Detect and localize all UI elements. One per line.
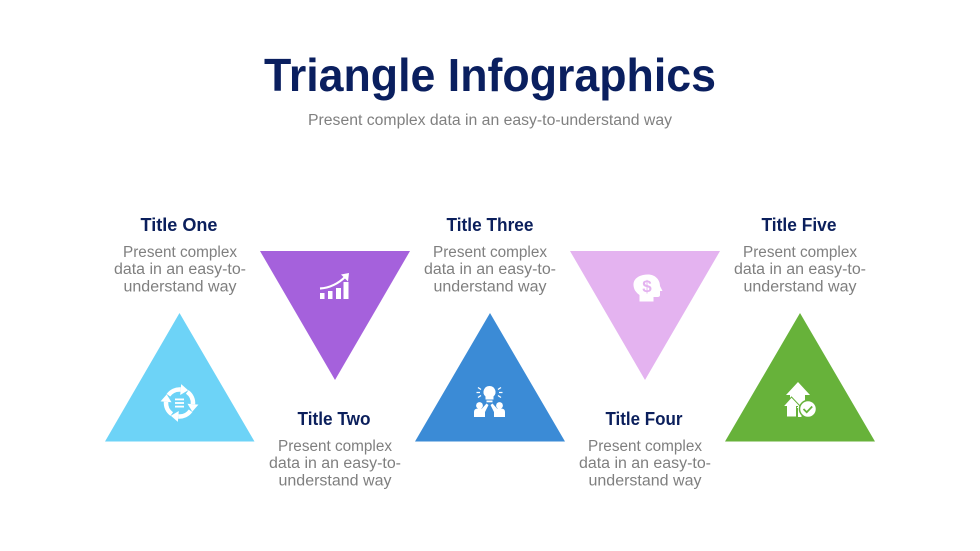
subtitle: Present complex data in an easy-to-understand way xyxy=(308,112,672,129)
panel: title two text xyxy=(269,408,401,490)
heading: title five: Title Five xyxy=(762,214,836,235)
text block: title two description: understand way xyxy=(278,472,392,490)
heading: title four: Title Four xyxy=(606,408,682,429)
icon: head with dollar sign xyxy=(634,274,662,302)
heading: title three: Title Three xyxy=(446,214,534,235)
text block: title two description: Present complex xyxy=(278,438,392,455)
icon: rising bar chart xyxy=(320,273,349,299)
text block: title five description: understand way xyxy=(744,278,857,296)
panel: title five text xyxy=(734,214,866,296)
text block: title three description xyxy=(424,244,556,296)
text block: title three description: Present complex xyxy=(433,244,547,261)
panel: title one text xyxy=(114,214,246,296)
icon: circular arrows with list xyxy=(160,383,199,423)
icon: head with dollar sign: $ xyxy=(642,277,652,296)
text block: title five description: data in an easy-to- xyxy=(734,261,866,278)
text block: title one description xyxy=(114,244,246,296)
icon: lightbulb with two people xyxy=(474,386,505,417)
text block: title five description xyxy=(734,244,866,296)
text block: title three description: data in an easy-to- xyxy=(424,261,556,278)
text block: title two description xyxy=(269,438,401,490)
icon: up arrows with check badge xyxy=(783,382,816,418)
text block: title one description: Present complex xyxy=(123,244,237,261)
text block: title four description: understand way xyxy=(588,472,702,490)
text block: title one description: understand way xyxy=(124,278,237,296)
text block: title four description: data in an easy-to- xyxy=(579,455,711,472)
text block: title four description: Present complex xyxy=(588,438,702,455)
title: Triangle Infographics xyxy=(264,49,716,101)
text block: title three description: understand way xyxy=(434,278,547,296)
triangle four xyxy=(570,251,720,380)
text block: title two description: data in an easy-to- xyxy=(269,455,401,472)
heading: title one: Title One xyxy=(140,214,218,235)
text block: title five description: Present complex xyxy=(743,244,857,261)
text block: title one description: data in an easy-to- xyxy=(114,261,246,278)
triangle one xyxy=(105,313,254,442)
heading: title two: Title Two xyxy=(298,408,370,429)
triangle two xyxy=(260,251,410,380)
triangle five xyxy=(725,313,875,442)
triangle three xyxy=(415,313,565,442)
panel: title four text xyxy=(579,408,711,490)
panel: title three text xyxy=(424,214,556,296)
text block: title four description xyxy=(579,438,711,490)
